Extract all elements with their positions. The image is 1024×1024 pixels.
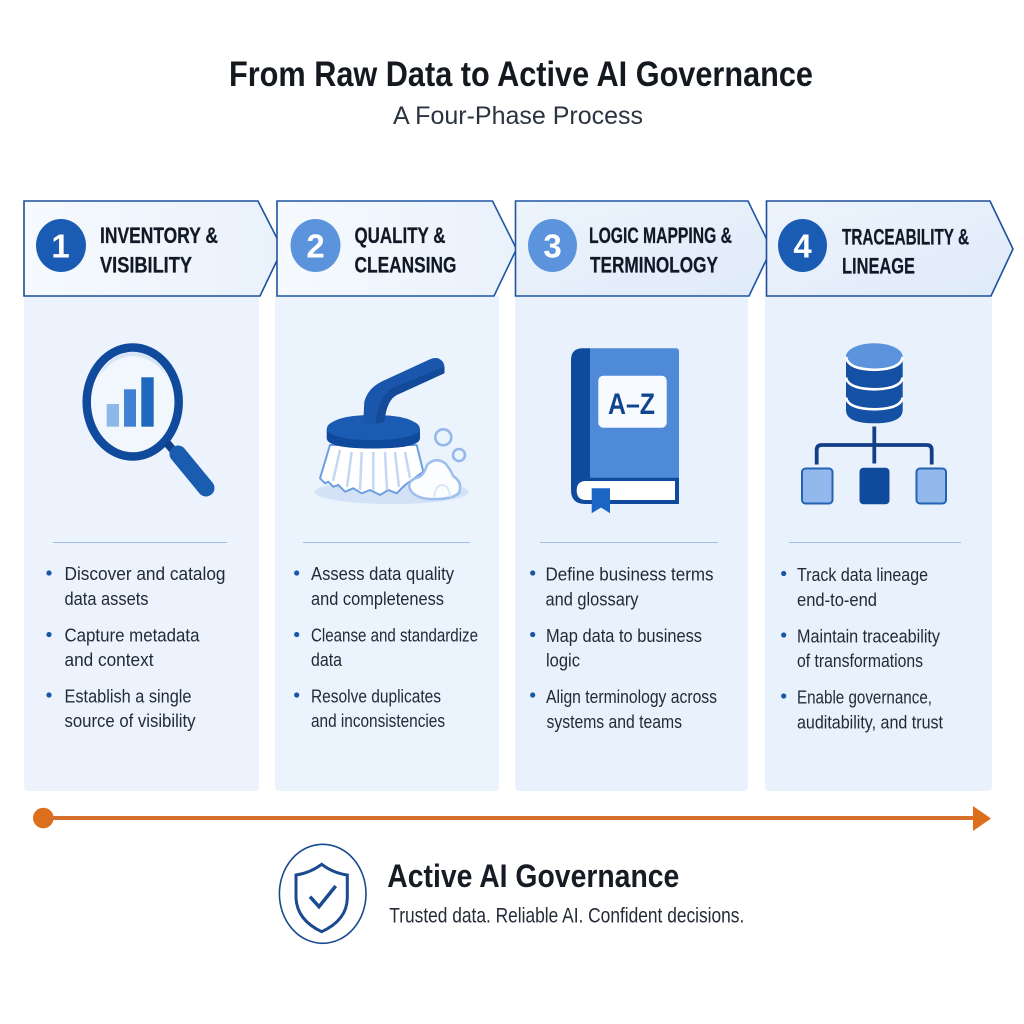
phase header arrows <box>23 200 1014 297</box>
text block: phase 2 bullets: and completeness <box>311 588 444 609</box>
text block: phase 4 bullets: of transformations <box>797 650 923 671</box>
number badge 4: 4 <box>793 228 812 264</box>
text block: phase 2 bullets: Assess data quality <box>311 563 455 584</box>
text block: phase 4 bullets: Maintain traceability <box>797 626 941 646</box>
number badge 3 <box>528 219 577 272</box>
heading: phase 4: TRACEABILITY & <box>842 224 969 250</box>
panel: phase 1 body <box>24 296 259 791</box>
text block: phase 4 bullets: Enable governance, <box>797 686 932 708</box>
text block: phase 3 bullets: Map data to business <box>546 625 702 646</box>
heading: phase 2: QUALITY & <box>354 223 446 248</box>
text block: phase 4 bullets <box>781 564 943 732</box>
heading: phase 2: CLEANSING <box>354 252 456 278</box>
text block: phase 2 bullets: and inconsistencies <box>311 710 445 731</box>
text block: phase 1 bullets: Discover and catalog <box>64 563 226 584</box>
text block: phase 2 bullets <box>294 563 478 731</box>
heading: phase 3: LOGIC MAPPING & <box>589 223 732 248</box>
number badge 1: 1 <box>51 228 70 264</box>
text block: phase 1 bullets: and context <box>64 649 154 670</box>
text block: phase 3 bullets: Define business terms <box>546 564 714 584</box>
heading: phase 4 <box>842 224 969 278</box>
phase headings <box>100 223 969 278</box>
subtitle: A Four-Phase Process <box>393 102 643 130</box>
heading: phase 4: LINEAGE <box>842 254 915 278</box>
text block: phase 1 bullets: source of visibility <box>64 710 196 731</box>
text block: phase 4 bullets: end-to-end <box>797 589 877 610</box>
heading: phase 3: TERMINOLOGY <box>590 252 718 278</box>
number badge 2: 2 <box>306 228 325 264</box>
text block: phase 1 bullets <box>46 563 226 731</box>
text block: phase 1 bullets: Establish a single <box>64 686 192 706</box>
heading: phase 1: VISIBILITY <box>100 252 192 278</box>
heading: phase 2 <box>354 223 456 278</box>
number badge 3: 3 <box>543 228 562 264</box>
header arrow 1 <box>24 201 282 296</box>
icon: shield badge <box>278 844 367 944</box>
header arrow 4 <box>766 201 1013 296</box>
heading: phase 1 <box>100 223 218 278</box>
text block: phase 2 bullets: data <box>311 649 343 670</box>
text block: phase 1 bullets: Capture metadata <box>64 624 200 646</box>
text block: phase 4 bullets: Track data lineage <box>797 564 928 585</box>
text block: phase 3 bullets: logic <box>546 650 580 670</box>
text block: phase 2 bullets: Resolve duplicates <box>311 686 441 706</box>
text block: phase 3 bullets <box>530 564 717 732</box>
heading: phase 3 <box>589 223 732 278</box>
header arrow 2 <box>277 201 516 296</box>
icon: glossary book: A–Z <box>608 388 655 421</box>
heading: phase 1: INVENTORY & <box>100 223 218 248</box>
icon: database hierarchy <box>801 343 947 504</box>
arrow: process timeline <box>33 806 991 831</box>
icon: magnifying glass with bars <box>82 343 214 496</box>
text block: phase 1 bullets: data assets <box>64 588 148 609</box>
panel: phase 2 body <box>275 296 499 791</box>
text block: phase 3 bullets: systems and teams <box>546 711 682 732</box>
panel: phase 4 body <box>765 296 992 791</box>
icon: glossary book <box>571 348 679 514</box>
icon: scrub brush with bubbles <box>314 358 468 504</box>
header arrow 3 <box>516 201 772 296</box>
text block: phase 3 bullets: and glossary <box>546 588 639 610</box>
panel: phase 3 body <box>515 296 748 791</box>
number badge 2 <box>290 219 340 272</box>
number badge 4 <box>778 219 827 272</box>
number badge 1 <box>36 219 86 272</box>
text block: phase 4 bullets: auditability, and trust <box>797 712 943 732</box>
